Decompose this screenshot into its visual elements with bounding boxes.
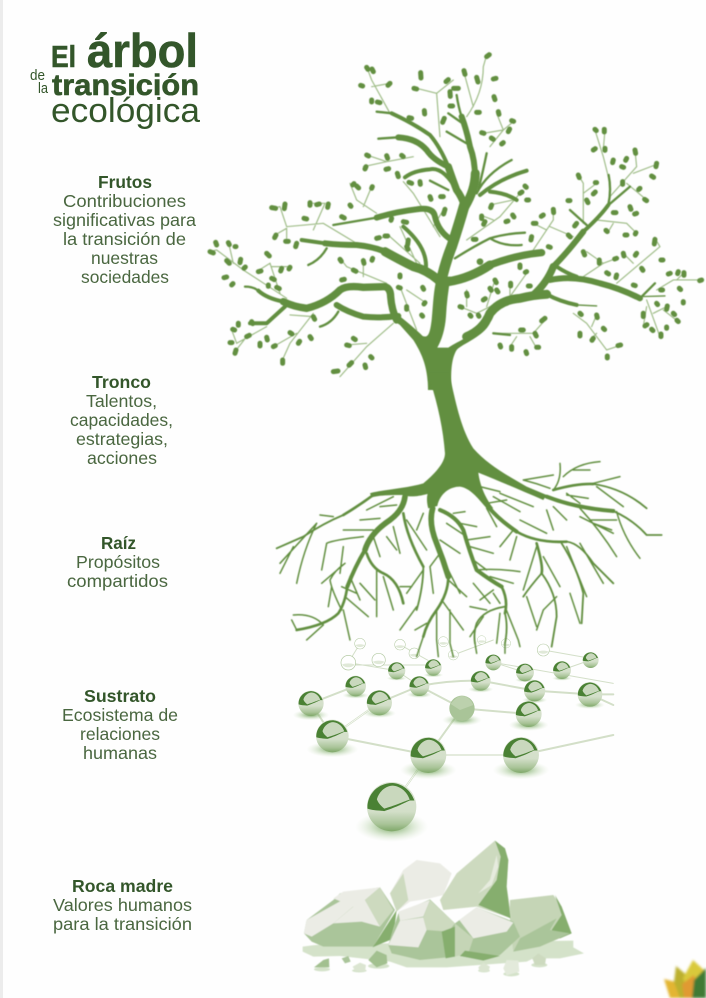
title (30, 24, 200, 130)
tree crown (208, 55, 702, 390)
text block: Tronco: estrategias, (76, 429, 168, 449)
text block: Frutos (53, 172, 196, 287)
trunk and limbs (395, 277, 490, 390)
leaves (210, 55, 702, 372)
text block: Tronco: Tronco (92, 372, 151, 392)
text block: Sustrato: Sustrato (84, 686, 156, 706)
left page edge (0, 0, 3, 998)
text block: Roca madre (53, 876, 192, 934)
title: de (30, 67, 45, 84)
logo (664, 960, 706, 998)
text block: Tronco (70, 372, 173, 468)
title: la (38, 80, 49, 97)
roots (277, 372, 662, 657)
text block: Roca madre: Valores humanos (53, 895, 192, 915)
text block: Tronco: Talentos, (86, 391, 157, 411)
rocks (roca madre) (303, 841, 584, 976)
text block: Roca madre: para la transición (53, 914, 192, 934)
text block: Sustrato: humanas (83, 743, 157, 763)
text block: Raíz: Raíz (101, 533, 136, 553)
text block: Sustrato: relaciones (80, 724, 160, 744)
text block: Frutos: significativas para (53, 210, 196, 230)
text block: Frutos: la transición de (63, 229, 186, 249)
solid spheres (298, 652, 602, 831)
title: El (51, 39, 76, 74)
text block: Sustrato (62, 686, 178, 763)
text block: Roca madre: Roca madre (72, 876, 173, 896)
text block: Raíz (67, 533, 168, 591)
text block: Raíz: compartidos (67, 571, 168, 591)
text block: Frutos: sociedades (81, 267, 169, 287)
text block: Sustrato: Ecosistema de (62, 705, 178, 725)
title: transición (52, 69, 199, 102)
text block: Tronco: capacidades, (70, 410, 173, 430)
text block: Frutos: Contribuciones (63, 191, 186, 211)
text block: Frutos: nuestras (91, 248, 158, 268)
title: árbol (87, 24, 198, 77)
faded spheres (341, 636, 549, 670)
text block: Frutos: Frutos (98, 172, 152, 192)
text block: Raíz: Propósitos (76, 552, 160, 572)
twigs (208, 55, 702, 377)
text block: Tronco: acciones (87, 448, 157, 468)
network of spheres (sustrato) (293, 636, 613, 842)
title: ecológica (51, 92, 200, 130)
